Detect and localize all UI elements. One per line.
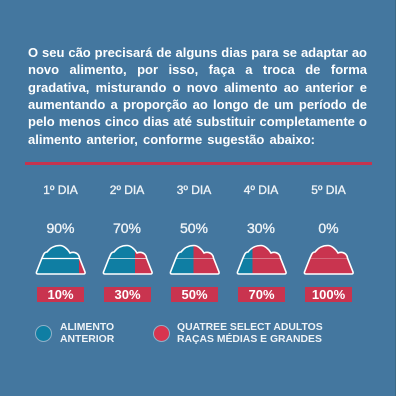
- legend text: new food: QUATREE SELECT ADULTOS: [177, 322, 323, 333]
- food bowl icons: [36, 244, 354, 275]
- new food tag: day 4: [238, 287, 285, 302]
- text block: introduction: O seu cão precisará de alguns dias para se adaptar ao: [28, 45, 367, 60]
- new food tag: day 3: [171, 287, 218, 302]
- previous food percent: day 3: 50%: [180, 220, 208, 236]
- legend text: new food: RAÇAS MÉDIAS E GRANDES: [177, 334, 322, 345]
- text block: introduction: [28, 45, 368, 147]
- heading: day 5: 5º DIA: [311, 183, 346, 197]
- heading: day 2: 2º DIA: [110, 183, 144, 197]
- icon: bowl day 1: [36, 245, 86, 275]
- new food tag: day 2: [104, 287, 151, 302]
- new food tag: day 2: 30%: [114, 287, 141, 302]
- previous food percent: day 1: 90%: [46, 220, 75, 236]
- previous food percent: day 4: 30%: [247, 220, 275, 236]
- legend text: previous food: ALIMENTO: [60, 322, 114, 333]
- text block: introduction: alimento anterior, conforme sugestão abaixo:: [28, 132, 315, 147]
- legend text: previous food: [60, 322, 114, 345]
- legend text: new food: [177, 322, 323, 345]
- text block: introduction: pelo menos cinco dias até substituir completamente o: [28, 114, 367, 129]
- legend dot: previous food: [35, 325, 52, 342]
- heading: day 3: 3º DIA: [177, 183, 211, 197]
- icon: bowl day 4: [237, 245, 287, 275]
- text block: introduction: novo alimento, por isso, faça a troca de forma: [28, 62, 367, 77]
- heading: day 1: 1º DIA: [43, 183, 78, 197]
- icon: bowl day 2: [103, 245, 153, 275]
- new food tag: day 3: 50%: [181, 287, 208, 302]
- heading: day 4: 4º DIA: [244, 183, 278, 197]
- previous food percent: day 2: 70%: [113, 220, 141, 236]
- text block: introduction: gradativa, misturando o novo alimento ao anterior e: [28, 80, 367, 95]
- red divider line: [25, 162, 372, 165]
- new food tag: day 4: 70%: [248, 287, 275, 302]
- legend dot: new food: [153, 325, 170, 342]
- new food tag: day 1: 10%: [47, 287, 74, 302]
- icon: bowl day 5: [304, 245, 354, 275]
- new food tag: day 5: 100%: [312, 287, 345, 302]
- text block: introduction: aumentando a proporção ao longo de um período de: [28, 97, 367, 112]
- new food tag: day 1: [37, 287, 84, 302]
- legend text: previous food: ANTERIOR: [60, 334, 114, 345]
- previous food percent: day 5: 0%: [318, 220, 339, 236]
- icon: bowl day 3: [170, 245, 220, 275]
